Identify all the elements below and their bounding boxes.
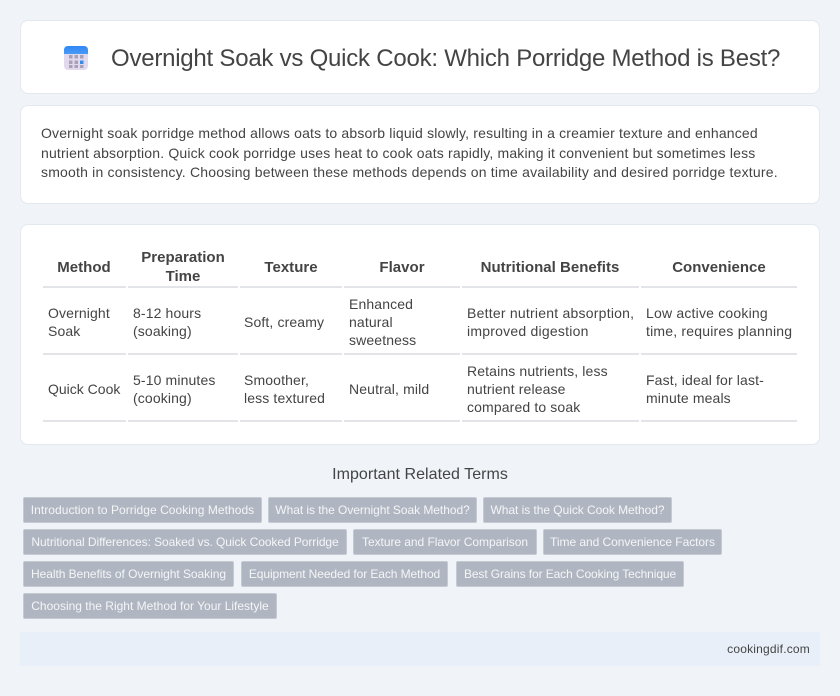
row: overnight soak: 8-12 hours <box>133 305 201 321</box>
row: quick cook: nutrient release <box>467 381 566 397</box>
related term tags: Texture and Flavor Comparison <box>362 535 528 549</box>
row: quick cook: Fast, ideal for last- <box>646 372 764 388</box>
row: quick cook <box>48 363 764 415</box>
row: overnight soak: Soft, creamy <box>244 314 324 330</box>
panel: title header <box>20 20 820 94</box>
intro text: Overnight soak porridge method allows oats to absorb liquid slowly, resulting in a creamier texture and enhanced <box>41 125 758 141</box>
intro text: nutrient absorption. Quick cook porridge uses heat to cook oats rapidly, making it convenient but sometimes less <box>41 145 755 161</box>
related term tags: What is the Overnight Soak Method? <box>275 503 470 517</box>
related term tags: Best Grains for Each Cooking Technique <box>464 567 676 581</box>
table headers <box>57 249 766 285</box>
related terms heading: Important Related Terms <box>332 466 508 483</box>
related term tags: Health Benefits of Overnight Soaking <box>31 567 226 581</box>
row: quick cook: (cooking) <box>133 390 192 406</box>
row: quick cook: minute meals <box>646 390 731 406</box>
row: overnight soak: Overnight <box>48 305 110 321</box>
row: overnight soak: Enhanced <box>349 296 413 312</box>
panel: introduction <box>20 105 820 204</box>
table headers: Texture <box>264 259 318 276</box>
row: overnight soak: (soaking) <box>133 323 192 339</box>
table headers: Flavor <box>379 259 425 276</box>
row: quick cook: 5-10 minutes <box>133 372 216 388</box>
row: quick cook: compared to soak <box>467 399 580 415</box>
row: overnight soak: natural <box>349 314 393 330</box>
related term tags <box>23 497 722 619</box>
row: quick cook: Quick Cook <box>48 381 120 397</box>
row: quick cook: Neutral, mild <box>349 381 429 397</box>
related term tags: Equipment Needed for Each Method <box>249 567 440 581</box>
table headers: Preparation <box>141 249 225 266</box>
row: quick cook: less textured <box>244 390 325 406</box>
row: overnight soak <box>48 296 792 348</box>
related term tags: Introduction to Porridge Cooking Methods <box>31 503 254 517</box>
table headers: Nutritional Benefits <box>481 259 619 276</box>
row: overnight soak: Low active cooking <box>646 305 768 321</box>
row: quick cook: Retains nutrients, less <box>467 363 608 379</box>
footer source: cookingdif.com <box>727 642 810 656</box>
row: quick cook: Smoother, <box>244 372 309 388</box>
row: overnight soak: time, requires planning <box>646 323 792 339</box>
table headers: Convenience <box>672 259 766 276</box>
related term tags: Choosing the Right Method for Your Lifestyle <box>31 599 269 613</box>
related term tags: Time and Convenience Factors <box>550 535 715 549</box>
table headers: Time <box>166 268 200 285</box>
title: Overnight Soak vs Quick Cook: Which Porridge Method is Best? <box>111 45 780 72</box>
related term tags: What is the Quick Cook Method? <box>491 503 664 517</box>
related term tags: Nutritional Differences: Soaked vs. Quick Cooked Porridge <box>31 535 339 549</box>
footer bar <box>20 632 820 666</box>
row: overnight soak: Soak <box>48 323 80 339</box>
row: overnight soak: sweetness <box>349 332 416 348</box>
icon: calendar <box>64 46 88 70</box>
row: overnight soak: Better nutrient absorption, <box>467 305 634 321</box>
row: overnight soak: improved digestion <box>467 323 589 339</box>
intro text: smooth in consistency. Choosing between these methods depends on time availability and desired porridge texture. <box>41 164 778 180</box>
intro text <box>41 125 778 180</box>
panel: comparison table <box>20 224 820 445</box>
table headers: Method <box>57 259 111 276</box>
